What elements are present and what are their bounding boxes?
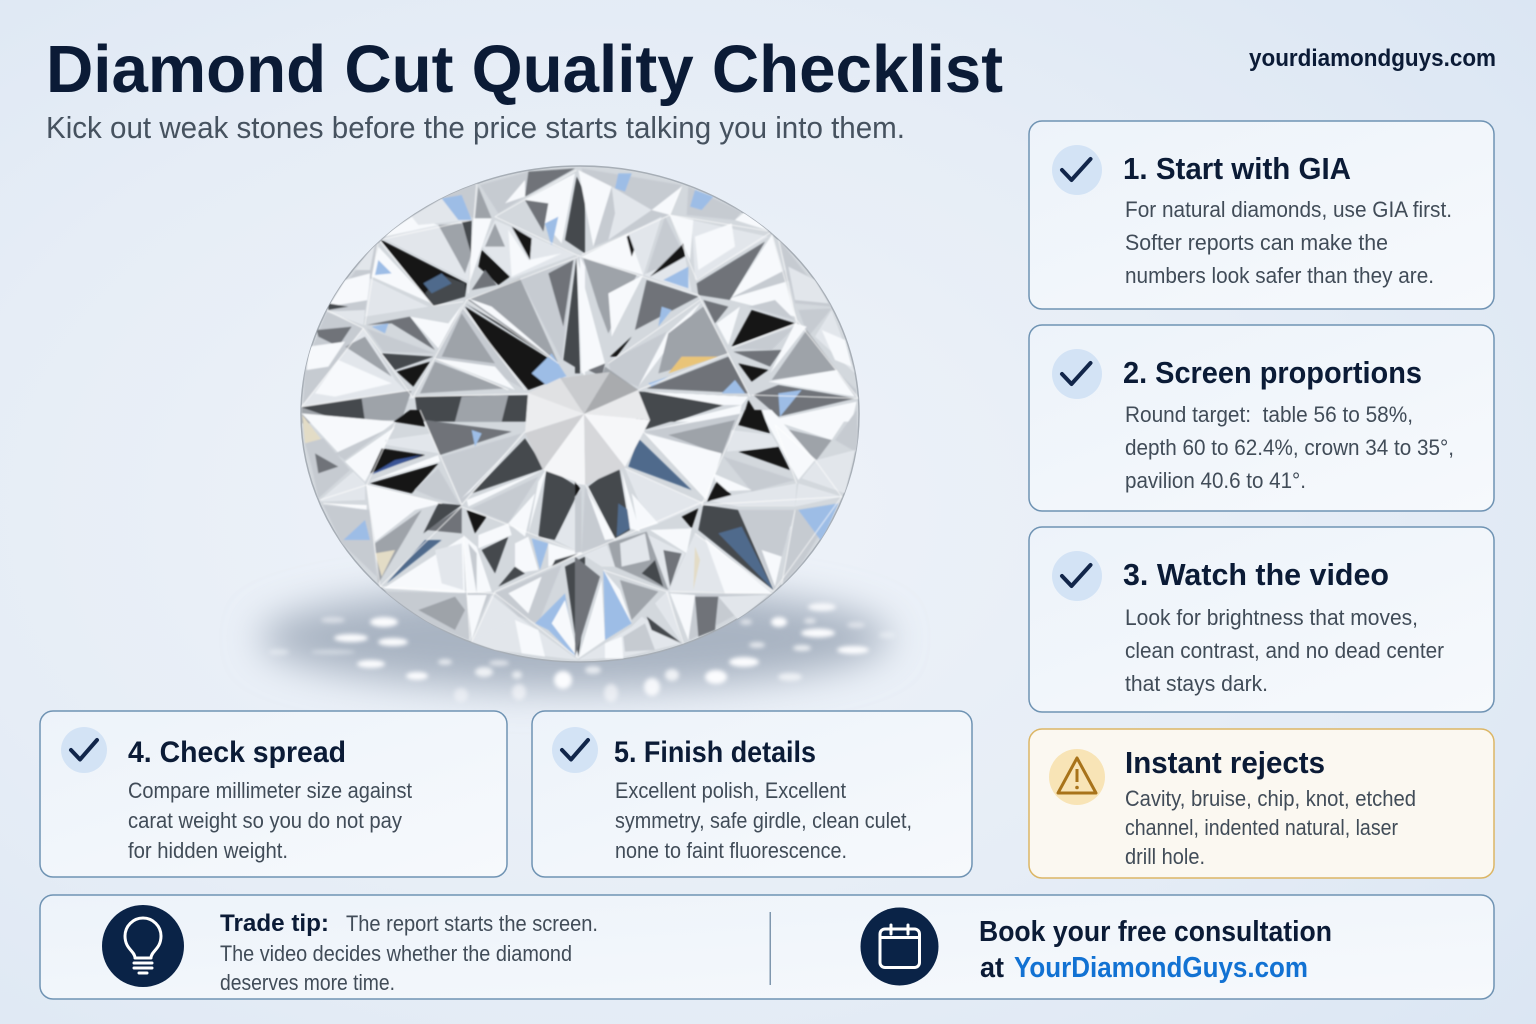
card 5: finish details: none to faint fluorescence.: [615, 838, 847, 863]
trade tip text: The report starts the screen.: [346, 911, 598, 936]
card 3: watch the video: [1029, 527, 1494, 712]
card 2: screen proportions: depth 60 to 62.4%, crown 34 to 35°,: [1125, 435, 1454, 460]
call to action text: Book your free consultation: [979, 916, 1332, 948]
card 1: start with GIA: Softer reports can make the: [1125, 230, 1388, 255]
culet centre: [525, 372, 650, 485]
call to action text: YourDiamondGuys.com: [1014, 952, 1308, 984]
card: instant rejects: Cavity, bruise, chip, knot, etched: [1125, 786, 1416, 811]
card 3: watch the video: Look for brightness that moves,: [1125, 605, 1418, 630]
trade tip text: [220, 910, 598, 995]
card 4: check spread: for hidden weight.: [128, 838, 288, 863]
icon: warning: [1049, 749, 1105, 805]
card 1: start with GIA: For natural diamonds, use GIA first.: [1125, 197, 1452, 222]
card 1: start with GIA: 1. Start with GIA: [1123, 151, 1351, 186]
call to action text: [979, 916, 1332, 984]
icon: check 1: [1052, 145, 1102, 195]
card 5: finish details: 5. Finish details: [614, 736, 816, 769]
icon: check 4: [61, 727, 107, 773]
card: instant rejects: Instant rejects: [1125, 745, 1325, 780]
card 5: finish details: [532, 711, 972, 877]
title: Diamond Cut Quality Checklist: [46, 32, 1003, 107]
website label: yourdiamondguys.com: [1249, 45, 1496, 72]
card: instant rejects: drill hole.: [1125, 844, 1205, 869]
card 2: screen proportions: 2. Screen proportions: [1123, 355, 1422, 390]
facets: upper left: [302, 168, 585, 423]
trade tip text: deserves more time.: [220, 970, 395, 995]
card: instant rejects: [1029, 729, 1494, 878]
trade tip text: Trade tip:: [220, 910, 329, 937]
icon: check 3: [1052, 551, 1102, 601]
icon: light bulb: [102, 905, 184, 987]
card 4: check spread: 4. Check spread: [128, 736, 346, 769]
trade tip text: The video decides whether the diamond: [220, 941, 572, 966]
diamond reflection shadow: [260, 586, 895, 702]
card 5: finish details: symmetry, safe girdle, clean culet,: [615, 808, 912, 833]
facets: lower left: [302, 410, 585, 660]
card 4: check spread: [40, 711, 507, 877]
card 3: watch the video: clean contrast, and no dead center: [1125, 638, 1444, 663]
card 2: screen proportions: pavilion 40.6 to 41°.: [1125, 468, 1306, 493]
icon: check 2: [1052, 349, 1102, 399]
card 4: check spread: carat weight so you do not pay: [128, 808, 402, 833]
icon: check 5: [552, 727, 598, 773]
card: instant rejects: channel, indented natural, laser: [1125, 815, 1398, 840]
card 5: finish details: Excellent polish, Excellent: [615, 778, 846, 803]
card 4: check spread: Compare millimeter size against: [128, 778, 412, 803]
facets: upper right: [575, 168, 858, 422]
icon: calendar: [860, 908, 938, 986]
card 1: start with GIA: numbers look safer than they are.: [1125, 263, 1434, 288]
card 3: watch the video: that stays dark.: [1125, 671, 1268, 696]
card 2: screen proportions: Round target: table 56 to 58%,: [1125, 402, 1413, 427]
card 1: start with GIA: [1029, 121, 1494, 309]
card 2: screen proportions: [1029, 325, 1494, 511]
call to action text: at: [980, 952, 1004, 984]
bottom banner: [40, 895, 1494, 999]
card 3: watch the video: 3. Watch the video: [1123, 557, 1389, 592]
diamond: [301, 166, 859, 662]
subtitle: Kick out weak stones before the price starts talking you into them.: [46, 110, 905, 145]
facets: lower right: [575, 410, 858, 660]
